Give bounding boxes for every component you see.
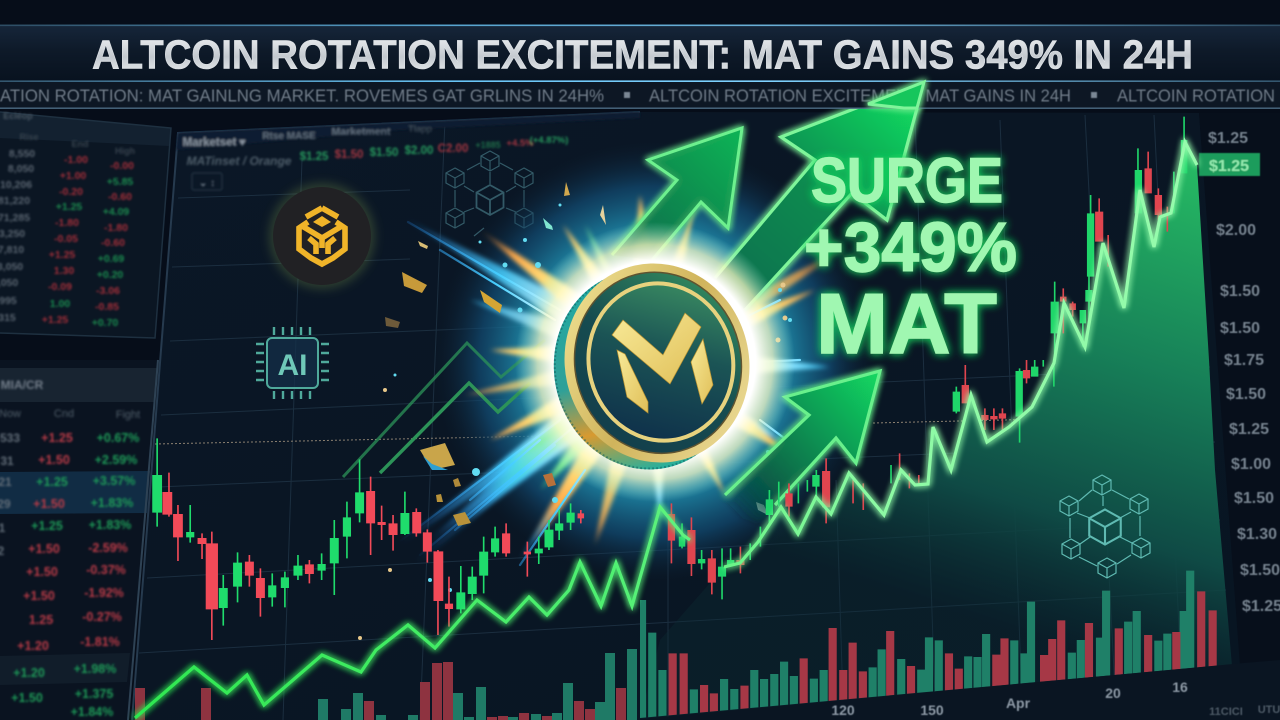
burst rays <box>335 195 850 627</box>
coin M logo <box>612 313 713 413</box>
chart toolbar: $2.00 <box>405 145 433 157</box>
icon: BNB coin badge <box>269 183 375 289</box>
burst backdrop <box>435 142 875 582</box>
panel: upper left data table: -3.06 <box>96 285 120 297</box>
x axis labels: Apr <box>1006 695 1031 711</box>
surge callout text <box>804 146 1017 372</box>
panel: lower left data table: +1.50 <box>23 589 55 603</box>
chart toolbar: (+4.87%) <box>530 135 568 146</box>
chart toolbar: +1885 <box>475 140 501 150</box>
surge callout text: MAT <box>816 277 997 372</box>
panel: upper left data table: +1.00 <box>60 170 86 182</box>
x axis labels: 16 <box>1172 679 1188 695</box>
chart toolbar <box>176 112 640 190</box>
panel: lower left data table: -0.27% <box>82 610 122 624</box>
chart toolbar: C2.00 <box>438 143 468 155</box>
panel: upper left data table: -1.80 <box>55 217 79 229</box>
arrow: left upward arrow <box>612 128 742 260</box>
panel: upper left data table: +0.69 <box>98 253 124 265</box>
right price axis labels: $1.30 <box>1237 526 1277 543</box>
title text: ALTCOIN ROTATION EXCITEMENT: MAT GAINS 349% IN 24H <box>92 32 1193 78</box>
glowing price line <box>135 142 1197 718</box>
chart toolbar: $1.50 <box>335 149 363 161</box>
panel: upper left data table: 1.30 <box>54 265 74 277</box>
x axis labels <box>831 679 1280 718</box>
right price axis labels: $2.00 <box>1216 222 1256 239</box>
coin <box>532 244 771 489</box>
panel: upper left data table: Ecléop <box>3 111 33 121</box>
chart grid lines <box>139 115 1226 720</box>
panel: lower left data table: +1.20 <box>17 639 49 653</box>
panel: lower left data table: 31 <box>0 454 14 468</box>
panel: upper left data table: 10,206 <box>0 179 32 191</box>
ticker strip: ALTCOIN ROTATION EXCITEMENT: MAT GAINS IN 24H <box>649 86 1071 106</box>
chart toolbar: MATinset / Orange <box>187 154 292 168</box>
panel: lower left data table: 1.25 <box>29 613 53 627</box>
chart toolbar: ⌄ ↕ <box>199 178 215 189</box>
panel: lower left data table: +1.25 <box>31 519 63 533</box>
panel: upper left data table: -0.60 <box>108 191 132 203</box>
panel: upper left data table: -0.60 <box>101 237 125 249</box>
icon: AI chip <box>256 327 329 399</box>
panel: upper left data table: -0.05 <box>54 233 78 245</box>
panel: lower left data table: +1.375 <box>75 687 113 701</box>
right price axis labels: $1.50 <box>1220 283 1260 300</box>
panel: upper left data table: +4.09 <box>103 206 129 218</box>
right price axis labels: $1.00 <box>1231 456 1271 473</box>
chart toolbar: Marketset ▾ <box>183 137 247 149</box>
right price axis labels: $1.25 <box>1229 421 1269 438</box>
panel: upper left data table: +1.25 <box>49 249 75 261</box>
panel: main chart background <box>132 112 1244 720</box>
right price axis labels: $1.50 <box>1234 490 1274 507</box>
right price axis labels: $1.50 <box>1240 562 1280 579</box>
right price axis labels: $1.25 <box>1208 130 1248 147</box>
arrow: large upper arrow <box>715 82 924 310</box>
panel: upper left data table: -0.20 <box>59 186 83 198</box>
panel: lower left data table: +1.50 <box>33 497 65 511</box>
volume bars left portion <box>135 649 637 720</box>
panel: lower left data table: +3.57% <box>93 474 135 488</box>
panel: lower left data table: -1.92% <box>84 586 124 600</box>
panel: upper left data table: -1.80 <box>104 222 128 234</box>
panel: lower left data table: +2.59% <box>95 453 137 467</box>
panel: lower left data table <box>0 360 158 720</box>
chart dotted level line <box>155 418 1089 444</box>
panel: upper left data table: 1.00 <box>50 298 70 310</box>
panel: lower left data table: 533 <box>0 431 20 445</box>
x axis strip <box>640 660 1280 720</box>
icon: blockchain network lower right <box>1060 475 1150 578</box>
icon: AI chip: AI <box>278 349 308 382</box>
panel: lower left data table: Fight <box>116 409 140 421</box>
green area under price line <box>640 142 1232 719</box>
title bar <box>0 24 1280 82</box>
x axis labels: 20 <box>1105 685 1121 701</box>
panel: right price axis background <box>1199 113 1280 720</box>
surge callout text: +349% <box>804 208 1017 286</box>
chart toolbar: $1.50 <box>370 147 398 159</box>
arrow: lower right arrow <box>706 371 880 522</box>
panel: upper left data table: +1.25 <box>56 201 82 213</box>
right price axis labels: $1.50 <box>1226 386 1266 403</box>
right price axis labels <box>1199 130 1280 615</box>
x axis labels: 120 <box>831 702 855 718</box>
burst core glow <box>515 222 795 502</box>
panel: upper left data table: +1.25 <box>42 314 68 326</box>
chart toolbar: Rtse MASE <box>262 131 316 142</box>
candlesticks left section <box>152 438 584 640</box>
panel: lower left data table: +1.25 <box>41 431 73 445</box>
panel: lower left data table: -1.81% <box>80 635 120 649</box>
ticker strip: ALTCOIN ROTATION <box>1117 86 1275 106</box>
chart panel border <box>132 112 640 720</box>
panel: lower left data table: +0.67% <box>97 431 139 445</box>
panel: upper left data table: -0.00 <box>110 160 134 172</box>
panel: lower left data table: +1.83% <box>91 496 133 510</box>
right price axis labels: $1.25 <box>1209 158 1249 175</box>
panel: lower left data table: +1.83% <box>89 518 131 532</box>
surge callout text: SURGE <box>811 146 1003 216</box>
panel: upper left data table: Rise <box>19 132 39 142</box>
faded green arrow behind coin <box>343 340 545 477</box>
panel: lower left data table: -2.59% <box>88 541 128 555</box>
panel: lower left data table: Cnd <box>54 408 74 420</box>
arrow tip over ticker <box>868 82 924 108</box>
candlesticks middle section <box>668 360 1055 599</box>
burst fragments and sparks <box>358 182 792 640</box>
panel: lower left data table: +1.50 <box>26 565 58 579</box>
x axis labels: UTU <box>1258 704 1280 716</box>
panel: upper left data table: +5.85 <box>107 176 133 188</box>
ticker strip: ATION ROTATION: MAT GAINLNG MARKET. ROVEMES GAT GRLINS IN 24H% <box>0 86 604 106</box>
burst thin streaks <box>395 222 800 565</box>
chart toolbar: +4.5% <box>506 138 534 149</box>
panel: upper left data table: 8,550 <box>9 148 35 160</box>
panel: lower left data table: +1.50 <box>38 453 70 467</box>
x axis labels: 11CICI <box>1209 706 1243 718</box>
panel: lower left data table: MIA/CR <box>1 378 44 392</box>
right price axis labels: $1.50 <box>1220 320 1260 337</box>
panel: lower left data table: +1.84% <box>71 705 113 719</box>
panel: upper left data table: -1.00 <box>64 154 88 166</box>
ticker strip <box>0 82 1280 109</box>
panel: lower left data table: +1.25 <box>36 475 68 489</box>
x axis labels: 150 <box>920 702 944 718</box>
panel: lower left data table: +1.20 <box>13 666 45 680</box>
panel: upper left data table: End <box>72 139 88 149</box>
panel: upper left data table: -0.85 <box>95 301 119 313</box>
panel: lower left data table: +1.50 <box>28 542 60 556</box>
panel: lower left data table: +1.98% <box>74 662 116 676</box>
panel: upper left data table: +0.20 <box>97 269 123 281</box>
panel: upper left data table: 8,050 <box>8 163 34 175</box>
volume bars right portion <box>640 571 1217 720</box>
panel: upper left data table <box>0 111 171 338</box>
chart toolbar: $1.25 <box>300 151 329 163</box>
icon: blockchain network top <box>446 151 533 236</box>
panel: lower left data table: +1.50 <box>11 691 43 705</box>
panel: upper left data table: High <box>115 146 135 156</box>
panel: upper left data table: +0.70 <box>92 317 118 329</box>
chart toolbar: Tlapp <box>408 124 432 135</box>
panel: lower left data table: -0.37% <box>86 563 126 577</box>
chart toolbar: Marketment <box>332 126 391 138</box>
panel: upper left data table: -0.09 <box>48 281 72 293</box>
candlesticks upper right section <box>1051 117 1187 360</box>
right price axis labels: $1.75 <box>1224 352 1264 369</box>
